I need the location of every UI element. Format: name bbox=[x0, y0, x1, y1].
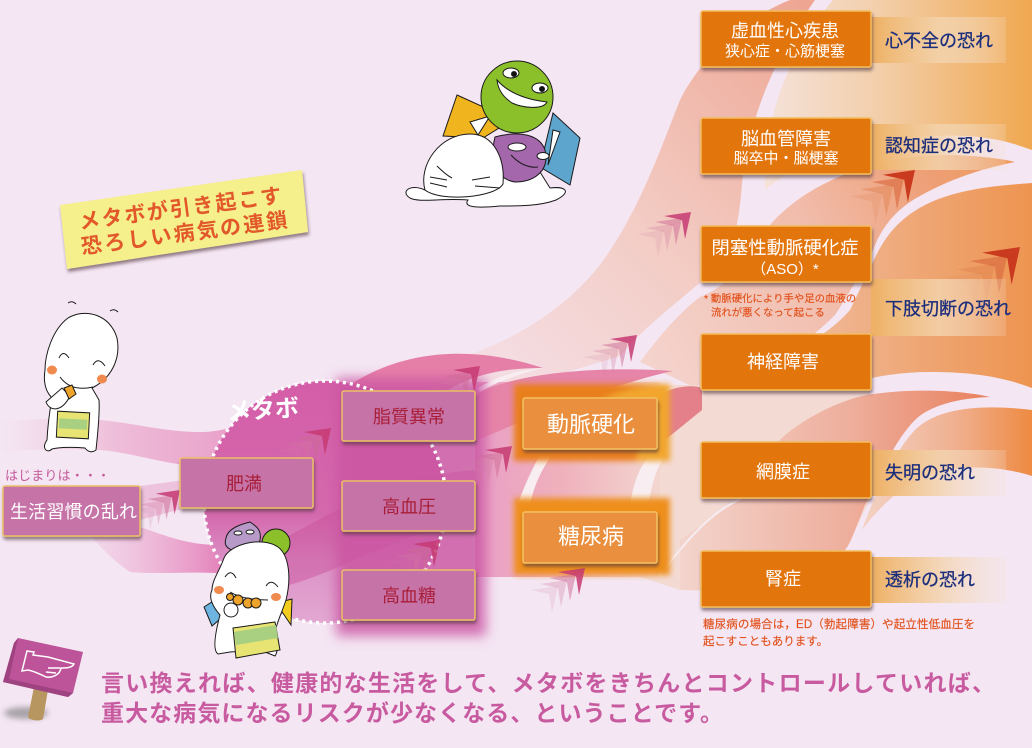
band: 心不全の恐れ bbox=[871, 17, 1006, 63]
box: 肥満: 肥満 bbox=[226, 474, 262, 494]
icon: pointing hand signboard bbox=[3, 638, 83, 720]
box: 肥満 bbox=[180, 458, 313, 508]
box: 高血圧 bbox=[342, 481, 475, 531]
sticky note title: メタボが引き起こす bbox=[78, 184, 283, 234]
note: ASO bbox=[704, 292, 856, 319]
box: 網膜症: 網膜症 bbox=[756, 462, 810, 482]
box: 虚血性心疾患 bbox=[701, 11, 871, 67]
box: 生活習慣の乱れ: 生活習慣の乱れ bbox=[10, 502, 137, 522]
box: 脳血管障害: 脳卒中・脳梗塞 bbox=[733, 150, 839, 167]
box: 虚血性心疾患: 狭心症・心筋梗塞 bbox=[725, 43, 845, 60]
band: 下肢切断の恐れ: 下肢切断の恐れ bbox=[885, 299, 1011, 319]
band: 透析の恐れ bbox=[871, 557, 1006, 603]
note: ASO: 流れが悪くなって起こる bbox=[711, 306, 825, 319]
conclusion text: 言い換えれば、健康的な生活をして、メタボをきちんとコントロールしていれば、 bbox=[101, 670, 995, 696]
box: 脂質異常 bbox=[342, 391, 475, 441]
flow chevrons bbox=[131, 170, 1020, 613]
box: 神経障害 bbox=[701, 334, 871, 390]
note: diabetes bbox=[703, 617, 975, 648]
metabo dotted ring bbox=[204, 381, 446, 623]
sticky note title: 恐ろしい病気の連鎖 bbox=[80, 209, 289, 259]
band: 心不全の恐れ: 心不全の恐れ bbox=[885, 31, 993, 51]
icon: mascot with germs eating snacks (bottom) bbox=[204, 522, 292, 658]
box: 網膜症 bbox=[701, 442, 871, 498]
box: 生活習慣の乱れ bbox=[3, 486, 140, 536]
label: はじまりは: はじまりは・・・ bbox=[5, 468, 110, 483]
box: 動脈硬化: 動脈硬化 bbox=[547, 412, 635, 437]
band: 透析の恐れ: 透析の恐れ bbox=[885, 570, 975, 590]
conclusion text bbox=[101, 670, 995, 726]
note: ASO: * 動脈硬化により手や足の血液の bbox=[704, 292, 856, 305]
box: 閉塞性動脈硬化症: （ASO）* bbox=[751, 261, 819, 278]
icon: mascot eating snack (top left) bbox=[44, 302, 118, 452]
sticky note title bbox=[60, 170, 308, 269]
box: 糖尿病 bbox=[523, 512, 657, 563]
box: 動脈硬化 bbox=[523, 398, 657, 449]
box: 糖尿病: 糖尿病 bbox=[558, 524, 624, 549]
band: 認知症の恐れ bbox=[871, 124, 1006, 170]
box: 高血糖 bbox=[342, 570, 475, 620]
box: 脳血管障害: 脳血管障害 bbox=[741, 129, 831, 149]
note: diabetes: 起こすこともあります。 bbox=[703, 635, 828, 648]
band: 認知症の恐れ: 認知症の恐れ bbox=[885, 136, 993, 156]
conclusion text: 重大な病気になるリスクが少なくなる、ということです。 bbox=[101, 700, 723, 726]
note: diabetes: 糖尿病の場合は，ED（勃起障害）や起立性低血圧を bbox=[703, 617, 975, 631]
glow behind risk boxes bbox=[336, 378, 486, 636]
box: 脂質異常: 脂質異常 bbox=[373, 407, 445, 427]
band: 失明の恐れ: 失明の恐れ bbox=[885, 463, 975, 483]
box: 閉塞性動脈硬化症: 閉塞性動脈硬化症 bbox=[711, 237, 859, 258]
box: 高血糖: 高血糖 bbox=[382, 586, 436, 606]
metabo circle bbox=[204, 381, 475, 623]
box: 神経障害: 神経障害 bbox=[747, 352, 819, 372]
band: 下肢切断の恐れ bbox=[871, 279, 1011, 336]
glow behind disease boxes bbox=[514, 384, 670, 575]
label: メタボ: メタボ bbox=[226, 395, 300, 426]
box: 閉塞性動脈硬化症 bbox=[701, 226, 871, 282]
box: 腎症 bbox=[701, 551, 871, 607]
band: 失明の恐れ bbox=[871, 450, 1006, 496]
box: 腎症: 腎症 bbox=[765, 569, 801, 589]
box: 脳血管障害 bbox=[701, 118, 871, 174]
icon: germ pile on mascot bbox=[406, 61, 580, 207]
box: 高血圧: 高血圧 bbox=[382, 497, 436, 517]
flow ribbons bbox=[0, 0, 1032, 591]
box: 虚血性心疾患: 虚血性心疾患 bbox=[731, 21, 839, 41]
